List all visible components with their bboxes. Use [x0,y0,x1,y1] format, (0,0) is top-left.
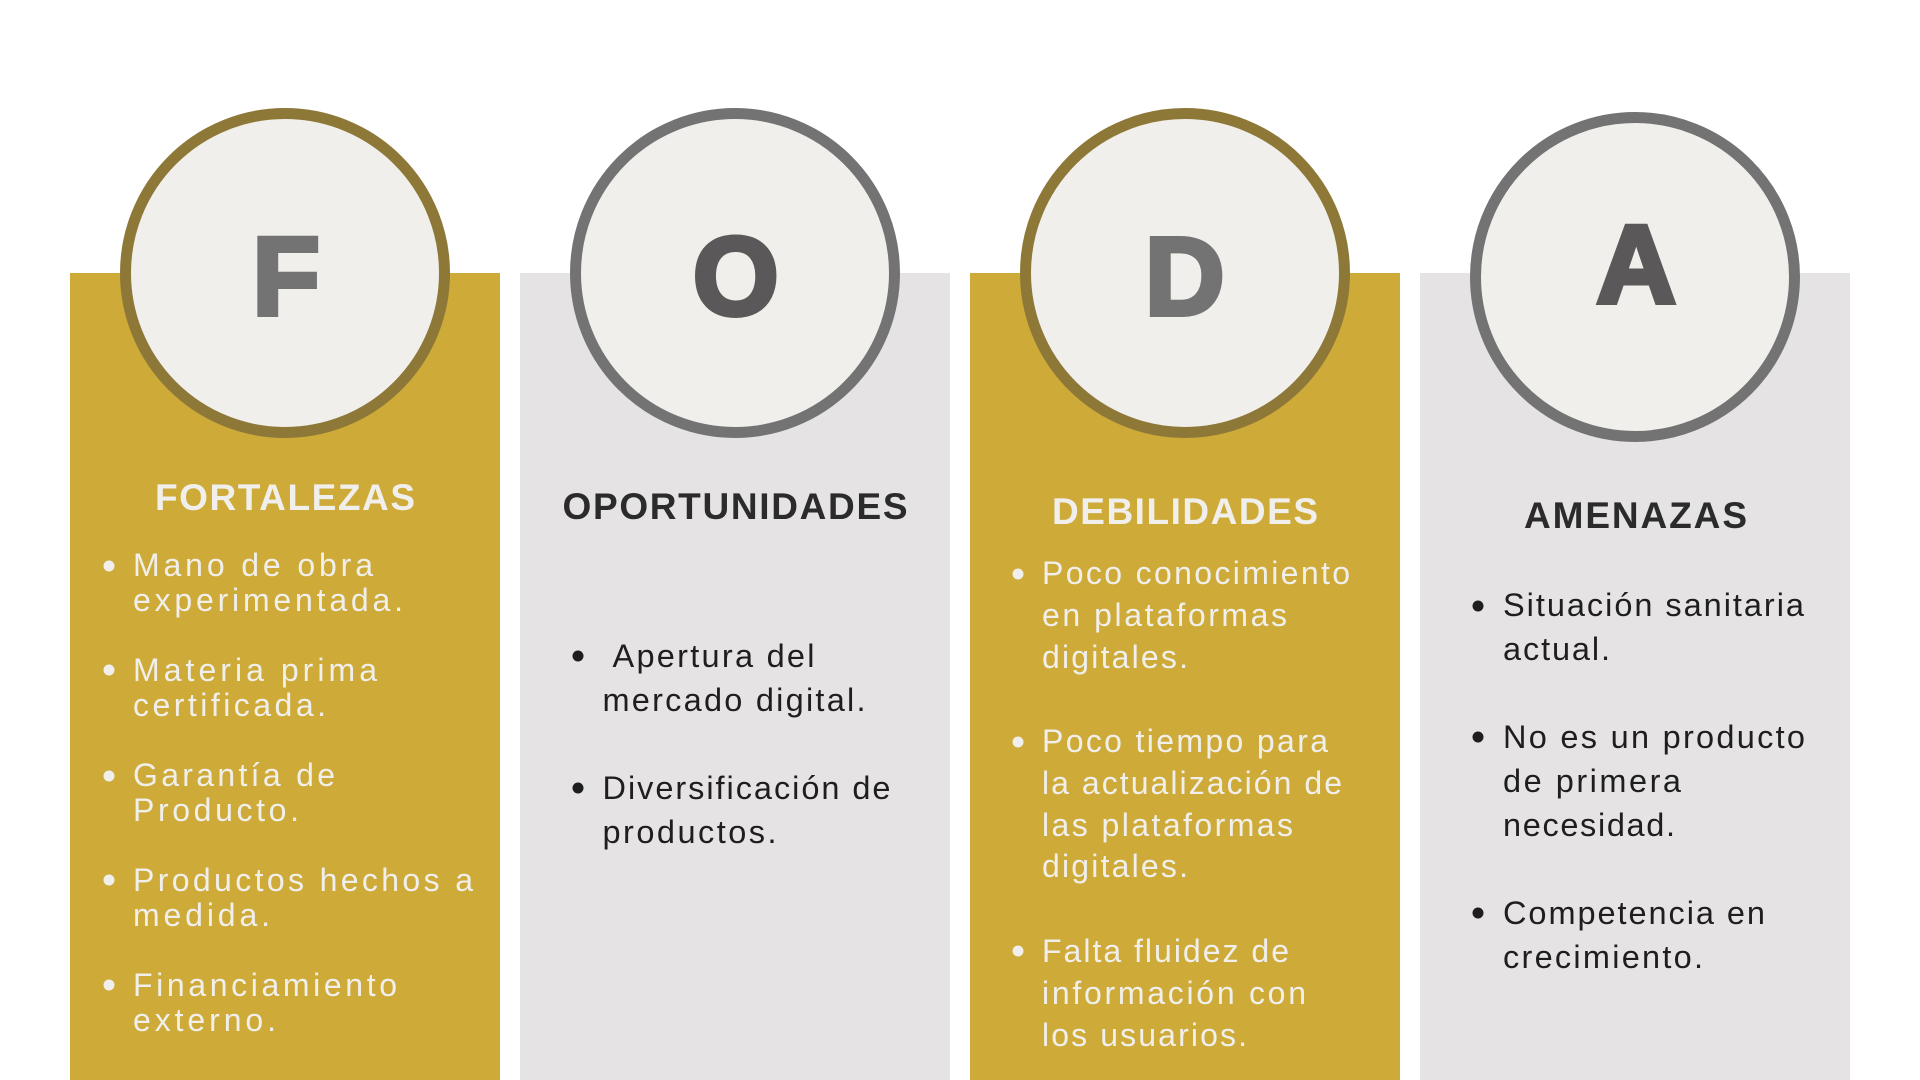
list: Amenazas items: crecimiento. [1503,939,1703,975]
panel background: Oportunidades [520,273,950,1080]
list: Amenazas items: necesidad. [1503,807,1675,843]
list: Fortalezas items: Materia prima [133,652,377,688]
list: Fortalezas items: Producto. [133,792,299,828]
list: Amenazas items: Competencia en [1503,895,1765,931]
list: Debilidades items: las plataformas [1042,807,1293,843]
heading: Oportunidades: OPORTUNIDADES [562,486,908,527]
list: Fortalezas items: certificada. [133,687,326,723]
heading: Amenazas: AMENAZAS [1524,495,1747,536]
list: Debilidades items: en plataformas [1042,597,1287,633]
list: Amenazas items: Situación sanitaria [1503,587,1805,623]
circle badge: O [576,114,894,432]
list: Fortalezas items: experimentada. [133,582,403,618]
circle badge: F: F [252,216,320,338]
list: Fortalezas items: externo. [133,1002,276,1038]
list: Amenazas items: actual. [1503,631,1610,667]
list: Fortalezas items [104,547,473,1038]
list: Amenazas items: No es un producto [1503,719,1805,755]
list: Debilidades items [1012,555,1350,1053]
list: Debilidades items: Falta fluidez de [1042,933,1289,969]
list: Fortalezas items: Mano de obra [133,547,373,583]
list: Debilidades items: digitales. [1042,639,1188,675]
list: Oportunidades items [572,638,890,850]
circle badge: D: D [1145,216,1224,338]
panel background: Amenazas [1420,273,1850,1080]
panel: Fortalezas [70,114,500,1080]
list: Fortalezas items: Garantía de [133,757,335,793]
list: Oportunidades items: productos. [602,814,776,850]
circle badge: A [1476,118,1794,436]
list: Debilidades items: la actualización de [1042,765,1342,801]
list: Fortalezas items: Productos hechos a [133,862,473,898]
circle badge: F [126,114,444,432]
list: Debilidades items: los usuarios. [1042,1017,1247,1053]
list: Oportunidades items: mercado digital. [602,682,866,718]
list: Debilidades items: Poco conocimiento [1042,555,1350,591]
list: Debilidades items: información con [1042,975,1306,1011]
panel: Oportunidades [520,114,950,1080]
list: Amenazas items [1472,587,1805,975]
circle badge: O: O [693,216,779,338]
list: Oportunidades items: Diversificación de [602,770,890,806]
panel background: Debilidades [970,273,1400,1080]
list: Fortalezas items: Financiamiento [133,967,397,1003]
list: Fortalezas items: medida. [133,897,270,933]
panel: Debilidades [970,114,1400,1080]
list: Debilidades items: Poco tiempo para [1042,723,1328,759]
heading: Fortalezas: FORTALEZAS [155,477,415,518]
list: Oportunidades items: Apertura del [612,638,814,674]
circle badge: D [1026,114,1344,432]
heading: Debilidades: DEBILIDADES [1052,491,1318,532]
panel background: Fortalezas [70,273,500,1080]
circle badge: A: A [1596,204,1676,326]
list: Debilidades items: digitales. [1042,848,1188,884]
panel: Amenazas [1420,118,1850,1080]
list: Amenazas items: de primera [1503,763,1682,799]
